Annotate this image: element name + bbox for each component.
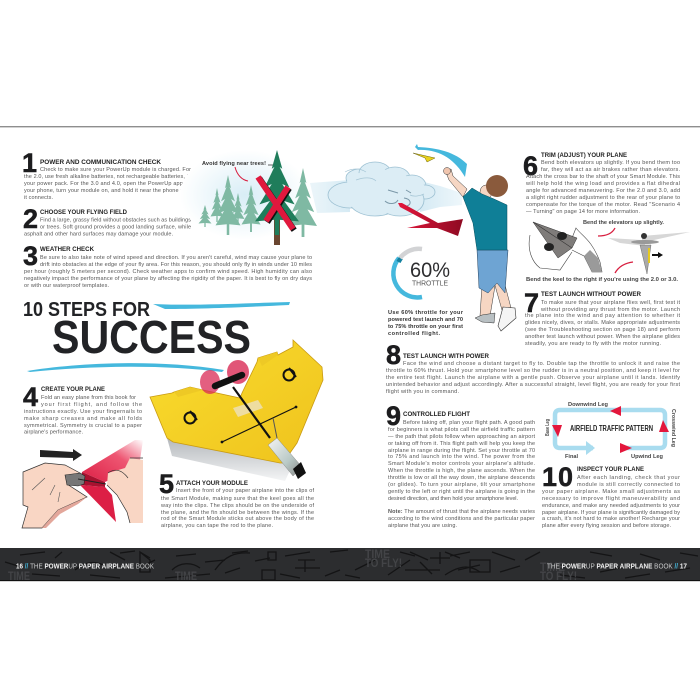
step 6: trim your plane: Attach the cross bar to the shaft of your Smart Module. This [526, 174, 680, 180]
step 4: create your plane: instructions exactly. Use your fingernails to [24, 409, 142, 415]
step 4: create your plane: symmetrical. Symmetry is crucial to a paper [24, 423, 142, 429]
diagram: airfield traffic pattern: AIRFIELD TRAFFIC PATTERN [570, 424, 653, 433]
step 2: choose your flying field: or trees. Soft ground provides a good landing surface, while [40, 224, 191, 230]
step 9: controlled flight: desired direction, and then hold your smartphone level. [388, 496, 518, 502]
step 10: inspect your plane [542, 462, 680, 529]
title: 10 steps for success: 10 STEPS FOR [23, 299, 150, 321]
title: 10 steps for success: SUCCESS [52, 311, 251, 363]
step 5: attach your module: the plane, and the fin should be between the wings. If the [161, 510, 314, 516]
step 6: trim your plane: Bend both elevators up slightly. If you bend them too [541, 160, 680, 166]
logo right [284, 368, 296, 380]
step 8: test launch with power: flight with you in command. [386, 389, 459, 395]
diagram: airfield traffic pattern [545, 402, 676, 460]
shirt [463, 188, 507, 250]
callout: bend elevators: Bend the elevators up slightly. [583, 220, 664, 226]
step 9: controlled flight: (or glides). To turn your airplane, tilt your smartphone [388, 482, 535, 488]
step 6: trim your plane: will help hold the wing load and provides a flat dihedral [525, 181, 680, 187]
step 10: inspect your plane: necessary to improve flight maneuverability and [542, 496, 680, 502]
step 9: controlled flight: When the throttle is high, the plane ascends. When the [388, 468, 535, 474]
gauge: 60% throttle [393, 249, 450, 297]
note: throttle advice [388, 310, 464, 337]
logo left [184, 411, 197, 424]
step 7: test launch without power: 7 [524, 288, 539, 318]
step 5: attach your module: ATTACH YOUR MODULE [176, 480, 248, 487]
step 2: choose your flying field: asphalt and other hard surfaces may damage your module. [24, 232, 173, 238]
step 10: inspect your plane: After each landing, check that your [577, 475, 680, 481]
step 9: controlled flight: airplane that you are using. [388, 523, 457, 529]
note: throttle advice: controlled flight. [388, 331, 440, 337]
step 8: test launch with power: the entire test flight. Launch the airplane with a gentle push. Observe your airplane until it lands. Identify [386, 375, 680, 381]
smart module [268, 438, 306, 479]
step 2: choose your flying field: 2 [23, 204, 38, 234]
footer ghost lettering: TO FLY! [365, 558, 402, 570]
step 8: test launch with power: 8 [386, 340, 401, 370]
step 7: test launch without power: To make sure that your airplane flies well, first test it [541, 300, 680, 306]
step 4: create your plane: your first flight, and follow the [41, 402, 142, 408]
step 9: controlled flight: Smart Module's motor controls your airplane's altitude. [388, 461, 535, 467]
arrow [40, 449, 82, 461]
step 3: weather check: Be sure to also take note of wind speed and direction. If you aren't careful, wind may cause your plane to [40, 255, 312, 261]
step 4: create your plane [23, 382, 142, 436]
step 6: trim your plane: compensate for the torque of the motor. Read "Scenario 4 [526, 202, 680, 208]
footer band [0, 548, 700, 583]
step 1: power and communication check: 1 [22, 148, 37, 178]
step 2: choose your flying field: CHOOSE YOUR FLYING FIELD [40, 209, 127, 216]
arrow: red wind direction [398, 203, 463, 236]
step 4: create your plane: CREATE YOUR PLANE [41, 386, 105, 393]
step 9: controlled flight: or taking off from it. This flight path will help you keep the [388, 441, 535, 447]
gauge: 60% throttle: THROTTLE [412, 278, 448, 288]
step 7: test launch without power: glides nicely, dives, or stalls. Make appropriate adjustments [525, 320, 680, 326]
illustration: trees to avoid [180, 150, 317, 245]
step 9: controlled flight: gently to the left or right until the airplane is going in the [388, 489, 535, 495]
step 7: test launch without power [524, 288, 680, 347]
step 9: controlled flight: for beginners is what pilots call the airfield traffic pattern [388, 427, 535, 433]
illustration: wind cloud [310, 162, 462, 216]
step 1: power and communication check: your power pack. For the 3.0 and 4.0, open the PowerUp app on [24, 181, 191, 187]
arrow: red elevator pointer [598, 228, 615, 236]
step 10: inspect your plane: endurance, and make any needed adjustments to your [542, 503, 680, 509]
diagram: airfield traffic pattern: Final [565, 454, 578, 460]
step 10: inspect your plane: your paper airplane. Make small adjustments as [542, 489, 680, 495]
step 9: controlled flight: Before taking off, plan your flight path. A good path [403, 420, 535, 426]
arrow: blue launch curve with yellow plane [413, 144, 467, 177]
step 7: test launch without power: steadily, you are ready to fly with the motor running. [525, 341, 661, 347]
step 8: test launch with power: Face the wind and choose a distant target to fly to. Double tap the throttle to unlock it and raise the [403, 361, 680, 367]
step 8: test launch with power [386, 340, 680, 395]
step 1: power and communication check [22, 148, 191, 201]
arrow: red keel pointer [615, 262, 633, 273]
step 4: create your plane: airplane's performance. [24, 430, 83, 436]
step 3: weather check: per hour (roughly 5 meters per second). Check weather apps to confirm wind speed. High humidity can also [24, 269, 312, 275]
step 1: power and communication check: your phone, turn your module on, and hold it near the phone until [24, 188, 191, 194]
step 2: choose your flying field [23, 204, 191, 238]
note: throttle advice: to 75% throttle on your first [388, 324, 463, 330]
step 10: inspect your plane: a crash, it's not hard to make another! Recharge your [542, 516, 680, 522]
arm [445, 169, 467, 197]
step 5: attach your module: way into the clips. The clips should be on the underside of [160, 503, 314, 509]
shorts [477, 250, 508, 293]
footer ghost lettering: TO FLY! [540, 571, 577, 583]
step 5: attach your module: airplane, you can tape the rod to the plane. [161, 523, 273, 529]
step 5: attach your module [159, 469, 314, 529]
gauge: 60% throttle: 60% [410, 259, 450, 282]
step 10: inspect your plane: 10 [542, 462, 573, 492]
step 1: power and communication check: the 2.0, use fresh alkaline batteries, not rechargeable batteries, in [24, 174, 191, 180]
step 2: choose your flying field: Find a large, grassy field without obstacles such as buildings [40, 218, 191, 224]
step 3: weather check: or with our waterproof templates. [24, 283, 109, 289]
diagram: airfield traffic pattern: Base Leg [545, 419, 551, 436]
step 6: trim your plane [523, 151, 680, 215]
step 10: inspect your plane: paper airplane. If your plane is significantly damaged by [542, 510, 680, 516]
tail view of plane [608, 232, 690, 274]
step 4: create your plane: Fold an easy plane from this book for [41, 395, 136, 401]
packing tape [233, 400, 263, 417]
step 6: trim your plane: 6 [523, 151, 538, 181]
footer ghost lettering [8, 549, 577, 583]
footer ghost lettering: TIME [8, 571, 30, 583]
step 10: inspect your plane: INSPECT YOUR PLANE [577, 466, 644, 473]
step 4: create your plane: make sharp creases and make all folds [24, 416, 142, 422]
step 9: controlled flight: according to the wind conditions and the particular paper [388, 516, 535, 522]
diagram: airfield traffic pattern: Crosswind Leg [670, 409, 676, 448]
illustration: boy launching plane [444, 168, 516, 331]
footer ghost lettering: TIME [365, 549, 390, 561]
footer left folio: 16 // THE POWERUP PAPER AIRPLANE BOOK [16, 564, 154, 570]
step 9: controlled flight: to 75% and launch into the wind. The power from the [388, 454, 535, 460]
step 1: power and communication check: Check to make sure your PowerUp module is charged. For [40, 167, 191, 173]
step 4: create your plane: 4 [23, 382, 38, 412]
step 7: test launch without power: without providing any thrust from the motor. Launch [540, 307, 680, 313]
diagram: airfield traffic pattern: Upwind Leg [631, 454, 664, 460]
step 1: power and communication check: it connects. [24, 195, 53, 201]
step 5: attach your module: 5 [159, 469, 174, 499]
legs [480, 280, 496, 316]
step 10: inspect your plane: plane after every flying session and before storage. [542, 523, 671, 529]
step 1: power and communication check: POWER AND COMMUNICATION CHECK [40, 159, 161, 166]
step 9: controlled flight: 9 [386, 401, 401, 431]
step 6: trim your plane: angle for advanced maneuvering. For the 2.0 and 3.0, add [526, 188, 680, 194]
page top rule [0, 126, 700, 127]
footer scribble pattern [5, 550, 698, 580]
step 6: trim your plane: TRIM (ADJUST) YOUR PLANE [541, 152, 627, 159]
step 5: attach your module: Insert the front of your paper airplane into the clips of [176, 488, 314, 494]
illustration: hands folding the paper plane [22, 440, 143, 528]
step 7: test launch without power: another test launch without power. When the airplane glides [525, 334, 680, 340]
red X [258, 177, 294, 230]
step 9: controlled flight: Note: The amount of thrust that the airplane needs varies [388, 509, 535, 515]
step 6: trim your plane: a slight right rudder adjustment to the rear of your plane to [526, 195, 680, 201]
step 9: controlled flight: — the path that pilots follow when approaching an airport [388, 434, 535, 440]
step 3: weather check: negatively impact the performance of your plane by affecting the rigidity of the paper. It is best to fly on dry days [24, 276, 312, 282]
step 3: weather check: 3 [23, 241, 38, 271]
step 7: test launch without power: TEST LAUNCH WITHOUT POWER [541, 291, 641, 298]
shoes [475, 313, 495, 323]
footer right folio: THE POWERUP PAPER AIRPLANE BOOK // 17 [547, 564, 687, 570]
callout: bend keel: Bend the keel to the right if you're using the 2.0 or 3.0. [526, 277, 678, 283]
step 3: weather check [23, 241, 312, 289]
step 8: test launch with power: TEST LAUNCH WITH POWER [403, 353, 489, 360]
note: throttle advice: Use 60% throttle for your [388, 310, 464, 316]
step 10: inspect your plane: module is still correctly connected to [577, 482, 680, 488]
step 9: controlled flight: throttle is low or all the way down, the airplane descends [388, 475, 535, 481]
callout: avoid flying near trees: Avoid flying near trees! [202, 161, 266, 167]
illustration: yellow paper airplane with module [150, 340, 323, 481]
step 6: trim your plane: far, they will act as air brakes rather than elevators. [541, 167, 680, 173]
step 9: controlled flight: airplane in range during the flight. Set your throttle at 70 [388, 448, 535, 454]
step 3: weather check: WEATHER CHECK [40, 246, 94, 253]
step 6: trim your plane: — Turning" on page 14 for more information. [526, 209, 640, 215]
step 9: controlled flight: CONTROLLED FLIGHT [403, 411, 471, 418]
step 5: attach your module: the Smart Module, making sure that the keel goes all the [161, 496, 314, 502]
illustration: bending the elevators [526, 220, 690, 283]
propeller [200, 360, 249, 394]
head [480, 185, 492, 199]
step 8: test launch with power: throttle to 60% thrust. Hold your smartphone level so the rudder is in a neutral position, and keep it level for [386, 368, 680, 374]
step 9: controlled flight [386, 401, 535, 529]
step 7: test launch without power: the plane into the wind and pay attention to whether it [525, 313, 680, 319]
note: throttle advice: powered test launch and 70 [388, 317, 463, 323]
step 8: test launch with power: unintended behavior and adjust accordingly. After a successful straight, level flight, you are ready for your first [386, 382, 680, 388]
step 5: attach your module: rod of the Smart Module sticks out above the body of the [161, 516, 314, 522]
footer ghost lettering: TIME [175, 571, 197, 583]
footer ghost lettering: TIME [540, 562, 565, 574]
step 7: test launch without power: (see the Troubleshooting section on page 18) and perform [525, 327, 680, 333]
diagram: airfield traffic pattern: Downwind Leg [568, 402, 609, 408]
title: 10 steps for success [23, 299, 290, 372]
step 3: weather check: drift into obstacles at the edge of your fly area. For this reason, you should only fly in winds under 10 miles [40, 262, 312, 268]
